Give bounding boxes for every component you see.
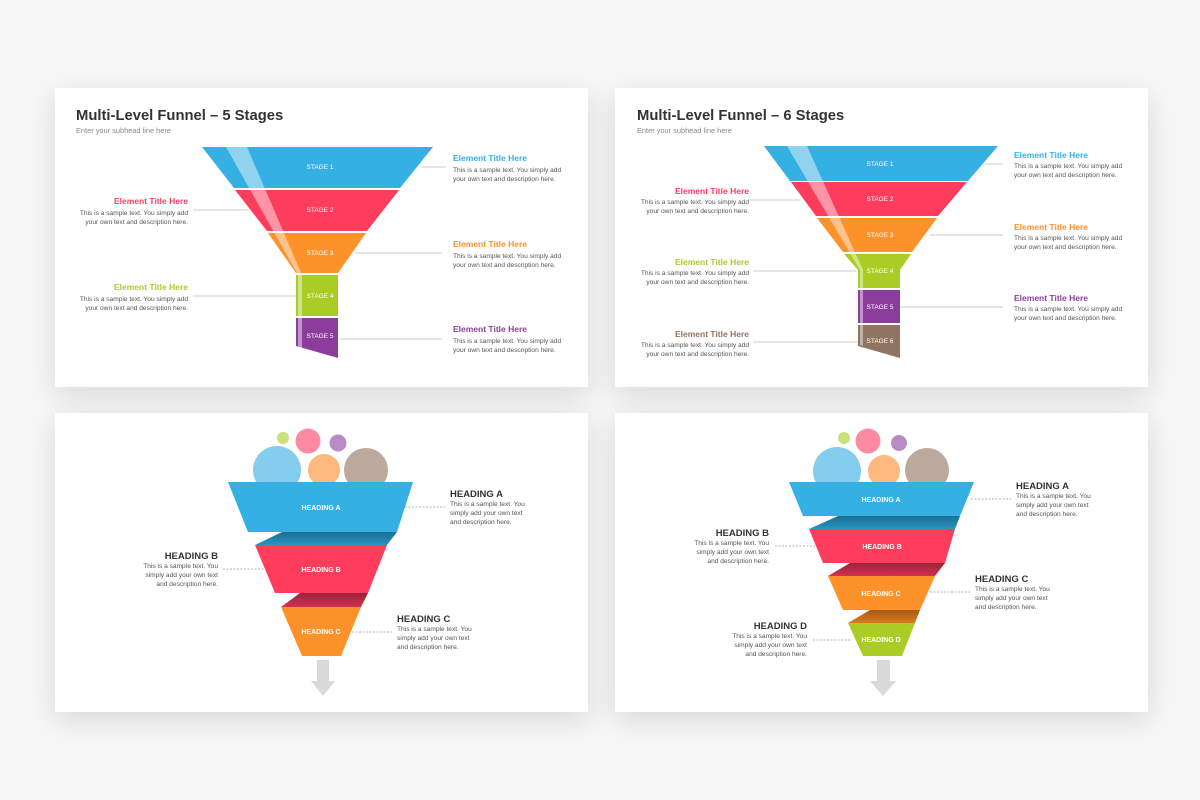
ribbon funnel: HEADING C xyxy=(301,629,341,636)
text: heading B: HEADING B xyxy=(716,528,769,539)
title: Multi-Level Funnel – 5 Stages xyxy=(76,108,283,124)
text: element 6: This is a sample text. You simply add xyxy=(641,342,749,349)
funnel 5 stages xyxy=(202,147,433,358)
text: element 2: Element Title Here xyxy=(114,196,188,206)
text: element 2: Element Title Here xyxy=(675,186,749,196)
text: heading C: simply add your own text xyxy=(397,635,470,642)
funnel 6 stages: STAGE 5 xyxy=(867,304,894,311)
text: heading B xyxy=(143,551,218,588)
arrow down xyxy=(870,660,896,696)
text: heading A: and description here. xyxy=(1016,511,1078,518)
funnel 6 stages: STAGE 3 xyxy=(867,232,894,239)
funnel 5 stages: STAGE 5 xyxy=(307,333,334,340)
text: heading D: This is a sample text. You xyxy=(732,633,807,640)
text: element 5: This is a sample text. You simply add xyxy=(1014,306,1122,313)
funnel 5 stages: STAGE 2 xyxy=(307,207,334,214)
text: element 2: your own text and description here. xyxy=(646,208,749,215)
text: heading D: and description here. xyxy=(745,651,807,658)
text: element 3: Element Title Here xyxy=(453,239,527,249)
text: element 4: Element Title Here xyxy=(675,257,749,267)
text: heading D: simply add your own text xyxy=(734,642,807,649)
group: panel 2 content xyxy=(637,108,1122,358)
text: heading B: and description here. xyxy=(156,581,218,588)
text: element 1 xyxy=(453,153,561,183)
text: element 5 xyxy=(453,324,561,354)
text: element 3: Element Title Here xyxy=(1014,222,1088,232)
ribbon funnel xyxy=(228,482,413,656)
text: element 2: This is a sample text. You simply add xyxy=(641,199,749,206)
text: heading C: and description here. xyxy=(975,604,1037,611)
text: heading C: and description here. xyxy=(397,644,459,651)
text: heading B: This is a sample text. You xyxy=(694,540,769,547)
text: heading A: HEADING A xyxy=(1016,481,1069,492)
text: heading C: simply add your own text xyxy=(975,595,1048,602)
text: heading A: HEADING A xyxy=(450,489,503,500)
ribbon funnel xyxy=(789,482,974,656)
text: element 3 xyxy=(1014,222,1122,251)
text: element 2 xyxy=(80,196,188,226)
text: element 4 xyxy=(641,257,749,286)
text: element 4: Element Title Here xyxy=(114,282,188,292)
text: element 4 xyxy=(80,282,188,312)
group: panel 4 content xyxy=(694,428,1091,696)
text: element 5: Element Title Here xyxy=(453,324,527,334)
text: heading C: This is a sample text. You xyxy=(397,626,472,633)
text: heading B: and description here. xyxy=(707,558,769,565)
text: element 1: Element Title Here xyxy=(1014,150,1088,160)
text: element 1: This is a sample text. You simply add xyxy=(453,167,561,174)
ribbon funnel: HEADING A xyxy=(861,497,901,504)
panel: 3 headings xyxy=(55,413,588,712)
text: heading B: simply add your own text xyxy=(696,549,769,556)
text: heading C: HEADING C xyxy=(397,614,450,625)
text: heading D: HEADING D xyxy=(754,621,807,632)
text: element 4: your own text and description here. xyxy=(85,305,188,312)
text: element 6: Element Title Here xyxy=(675,329,749,339)
text: element 1: This is a sample text. You simply add xyxy=(1014,163,1122,170)
text: element 5: This is a sample text. You simply add xyxy=(453,338,561,345)
arrow down xyxy=(311,660,335,696)
text: heading A: and description here. xyxy=(450,519,512,526)
text: heading A xyxy=(1016,481,1091,518)
panel: 6 stages xyxy=(615,88,1148,387)
text: element 2: This is a sample text. You simply add xyxy=(80,210,188,217)
text: element 3: your own text and description here. xyxy=(1014,244,1117,251)
subhead: Enter your subhead line here xyxy=(637,126,732,135)
panel: 4 headings xyxy=(615,413,1148,712)
ribbon funnel: HEADING B xyxy=(862,544,902,551)
text: heading A: simply add your own text xyxy=(1016,502,1089,509)
text: element 5 xyxy=(1014,293,1122,322)
text: heading C: This is a sample text. You xyxy=(975,586,1050,593)
subhead: Enter your subhead line here xyxy=(76,126,171,135)
text: element 5: Element Title Here xyxy=(1014,293,1088,303)
text: element 4: This is a sample text. You simply add xyxy=(80,296,188,303)
text: element 1: your own text and description here. xyxy=(453,176,556,183)
text: element 1: your own text and description here. xyxy=(1014,172,1117,179)
text: heading B xyxy=(694,528,769,565)
group: panel 3 content xyxy=(143,428,525,696)
text: heading A: This is a sample text. You xyxy=(450,501,525,508)
text: element 4: This is a sample text. You simply add xyxy=(641,270,749,277)
text: element 1 xyxy=(1014,150,1122,179)
ribbon funnel: HEADING B xyxy=(301,567,341,574)
funnel 6 stages: STAGE 4 xyxy=(867,268,894,275)
text: heading B: HEADING B xyxy=(165,551,218,562)
panel: 5 stages xyxy=(55,88,588,387)
text: heading B: This is a sample text. You xyxy=(143,563,218,570)
circles xyxy=(253,428,388,494)
text: element 3: your own text and description here. xyxy=(453,262,556,269)
funnel 5 stages: STAGE 1 xyxy=(307,164,334,171)
text: element 6: your own text and description here. xyxy=(646,351,749,358)
funnel 6 stages: STAGE 1 xyxy=(867,161,894,168)
text: element 2 xyxy=(641,186,749,215)
text: heading B: simply add your own text xyxy=(145,572,218,579)
text: element 3 xyxy=(453,239,561,269)
title: Multi-Level Funnel – 6 Stages xyxy=(637,108,844,124)
funnel 6 stages: STAGE 2 xyxy=(867,196,894,203)
ribbon funnel: HEADING C xyxy=(861,591,901,598)
funnel 5 stages: STAGE 3 xyxy=(307,250,334,257)
text: heading C: HEADING C xyxy=(975,574,1028,585)
text: heading D xyxy=(732,621,807,658)
funnel 6 stages xyxy=(764,146,998,358)
text: element 2: your own text and description here. xyxy=(85,219,188,226)
text: element 4: your own text and description here. xyxy=(646,279,749,286)
text: heading A: This is a sample text. You xyxy=(1016,493,1091,500)
text: element 5: your own text and description here. xyxy=(453,347,556,354)
text: element 6 xyxy=(641,329,749,358)
funnel 5 stages: STAGE 4 xyxy=(307,293,334,300)
text: element 3: This is a sample text. You simply add xyxy=(453,253,561,260)
text: heading C xyxy=(975,574,1050,611)
text: heading A: simply add your own text xyxy=(450,510,523,517)
ribbon funnel: HEADING D xyxy=(861,637,901,644)
circles xyxy=(813,428,949,495)
funnel 6 stages: STAGE 6 xyxy=(867,338,894,345)
text: element 1: Element Title Here xyxy=(453,153,527,163)
text: element 5: your own text and description here. xyxy=(1014,315,1117,322)
text: element 3: This is a sample text. You simply add xyxy=(1014,235,1122,242)
text: heading C xyxy=(397,614,472,651)
text: heading A xyxy=(450,489,525,526)
ribbon funnel: HEADING A xyxy=(301,505,341,512)
group: panel 1 content xyxy=(76,108,561,358)
